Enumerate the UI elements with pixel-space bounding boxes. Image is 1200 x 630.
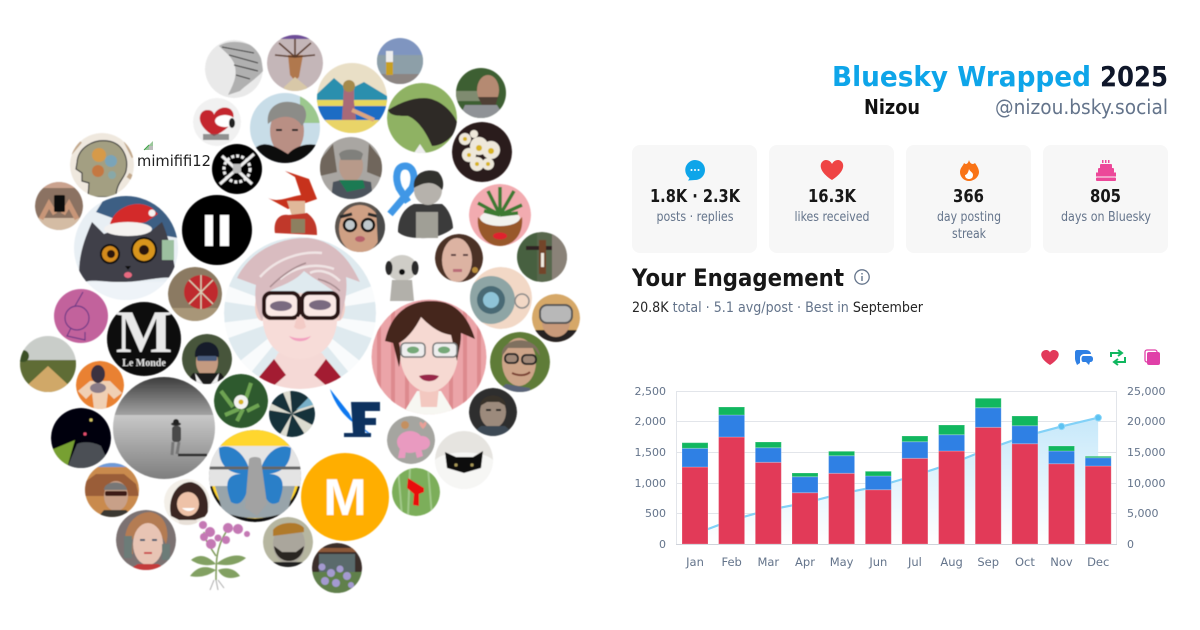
avatar: pink-haired cartoon with glasses	[220, 237, 380, 389]
title: 2025	[1100, 60, 1168, 93]
avatar: Le Monde logo: Le Monde	[122, 358, 166, 369]
engagement summary: 20.8K total · 5.1 avg/post · Best in September	[632, 300, 923, 316]
avatar: red wizard	[268, 171, 317, 235]
month labels: Jun	[868, 555, 887, 569]
handle: @nizou.bsky.social	[995, 95, 1168, 119]
icon: flame	[960, 160, 979, 181]
avatar: butterfly woman	[209, 430, 301, 522]
avatar: smiling cartoon girl	[164, 479, 210, 526]
stat value: 805	[1090, 186, 1121, 207]
avatar: coconut with lips	[469, 184, 531, 246]
avatar: road at night	[51, 408, 111, 468]
avatar: man with sunglasses in desert	[85, 463, 139, 517]
stat label: day posting	[937, 210, 1001, 225]
title: Bluesky Wrapped	[832, 60, 1091, 93]
month labels: May	[830, 555, 854, 569]
avatar: desert walker	[113, 377, 215, 479]
right axis labels: 15,000	[1127, 446, 1166, 459]
stat value: 16.3K	[808, 186, 857, 207]
month labels: Sep	[977, 555, 999, 569]
right axis labels: 0	[1127, 538, 1134, 551]
icon: reposts legend	[1111, 350, 1125, 365]
avatar: bald man	[456, 68, 506, 118]
icon: likes legend	[1041, 350, 1059, 365]
avatar cluster	[17, 35, 580, 594]
icon: birthday cake	[1096, 160, 1116, 181]
avatar: red ornament ball	[168, 267, 222, 321]
avatar: pause icon	[182, 195, 252, 265]
month labels: Jul	[907, 555, 922, 569]
avatar: woman portrait	[435, 234, 483, 282]
right axis labels: 10,000	[1127, 477, 1166, 490]
avatar: irises in front of building	[312, 543, 362, 594]
month labels: Oct	[1015, 555, 1035, 569]
right axis labels: 25,000	[1127, 385, 1166, 398]
stat label: days on Bluesky	[1061, 210, 1151, 225]
avatar: orchid	[190, 521, 250, 590]
avatar: smiling man with glasses	[490, 332, 550, 392]
avatar: brain collage head	[70, 133, 134, 197]
avatar: christmas cat	[74, 196, 178, 300]
avatar: snoopy heart	[193, 98, 241, 146]
avatar: man with phone	[35, 182, 83, 230]
month labels: Apr	[795, 555, 815, 569]
icon: replies legend	[1075, 350, 1093, 365]
avatar: greyhound dog	[387, 83, 457, 153]
left axis labels: 1,500	[634, 446, 666, 459]
chart: monthly engagement	[634, 385, 1166, 569]
month labels: Jan	[685, 555, 704, 569]
avatar alt text: mimififi12	[137, 152, 211, 170]
avatar: yellow M logo: M	[323, 469, 367, 527]
month labels	[685, 555, 1109, 569]
stat label: posts · replies	[656, 210, 734, 225]
avatar: man with round glasses	[335, 202, 385, 253]
chart legend	[1041, 350, 1160, 365]
avatar: crossed-out emblem	[212, 144, 262, 194]
left axis labels: 1,000	[634, 477, 666, 490]
icon: quotes legend	[1145, 350, 1160, 365]
icon: info	[855, 270, 869, 284]
month labels: Feb	[722, 555, 742, 569]
month labels: Dec	[1087, 555, 1109, 569]
panel: day posting streak	[906, 145, 1031, 253]
left axis labels: 500	[645, 507, 666, 520]
icon: broken image placeholder	[144, 141, 153, 150]
heading: your engagement: Your Engagement	[631, 264, 844, 292]
stat value: 1.8K · 2.3K	[650, 186, 741, 207]
avatar: palm fronds	[268, 390, 316, 438]
avatar: white daisy in grass	[214, 374, 268, 428]
stacked bars	[682, 398, 1111, 544]
left axis labels	[634, 385, 666, 551]
line markers	[1058, 414, 1101, 430]
avatar: camera lens face	[467, 267, 532, 329]
avatar: woman with red hair	[116, 510, 176, 570]
avatar: man with beanie	[182, 334, 232, 384]
avatar: bearded man with crown	[263, 517, 313, 567]
avatar: yellow M logo	[301, 453, 389, 541]
avatar: country road	[17, 336, 76, 392]
avatar: red poppy	[392, 468, 440, 516]
month labels: Mar	[757, 555, 779, 569]
avatar: rugged dark man	[469, 388, 517, 436]
right axis labels	[1127, 385, 1166, 551]
left axis labels: 0	[659, 538, 666, 551]
stat label: likes received	[794, 210, 870, 225]
panel: likes received	[769, 145, 894, 253]
panel: days on Bluesky	[1043, 145, 1168, 253]
avatar: pink cartoon	[54, 289, 108, 343]
avatar: man by the sea	[377, 38, 423, 84]
avatar: wooden cross in foliage	[517, 232, 567, 282]
avatar: painted mountain lake	[317, 63, 387, 134]
left axis labels: 2,000	[634, 415, 666, 428]
icon: chat bubble	[685, 160, 705, 180]
avatar: grey feather sketch	[205, 40, 263, 98]
avatar: brown-haired cartoon with glasses	[372, 300, 486, 417]
right axis labels: 5,000	[1127, 507, 1158, 520]
stat label second line: streak	[952, 227, 986, 242]
avatar: man with ski goggles	[532, 294, 580, 342]
right axis labels: 20,000	[1127, 415, 1166, 428]
month labels: Nov	[1050, 555, 1073, 569]
panel: posts and replies	[632, 145, 757, 253]
display name: Nizou	[864, 95, 920, 119]
avatar: man with green scarf	[320, 137, 382, 199]
month labels: Aug	[940, 555, 963, 569]
stat value: 366	[953, 186, 984, 207]
cumulative line	[695, 418, 1098, 534]
avatar: shaggy white dog	[386, 255, 418, 301]
avatar: man with white hair	[250, 93, 320, 163]
avatar: Le Monde logo: M	[116, 299, 172, 365]
avatar: black kitten in white	[435, 431, 493, 489]
avatar: orange illustrated figure	[76, 361, 124, 409]
cumulative area	[695, 418, 1098, 544]
avatar: Le Figaro F logo	[330, 389, 380, 437]
avatar: Le Monde logo	[107, 299, 181, 376]
avatar: daisies on dark	[452, 122, 512, 182]
left axis labels: 2,500	[634, 385, 666, 398]
icon: heart	[821, 160, 843, 180]
avatar: blue ribbon and boy	[390, 166, 453, 238]
avatar: carved mask	[267, 35, 323, 91]
avatar: pink elephants	[387, 416, 435, 464]
